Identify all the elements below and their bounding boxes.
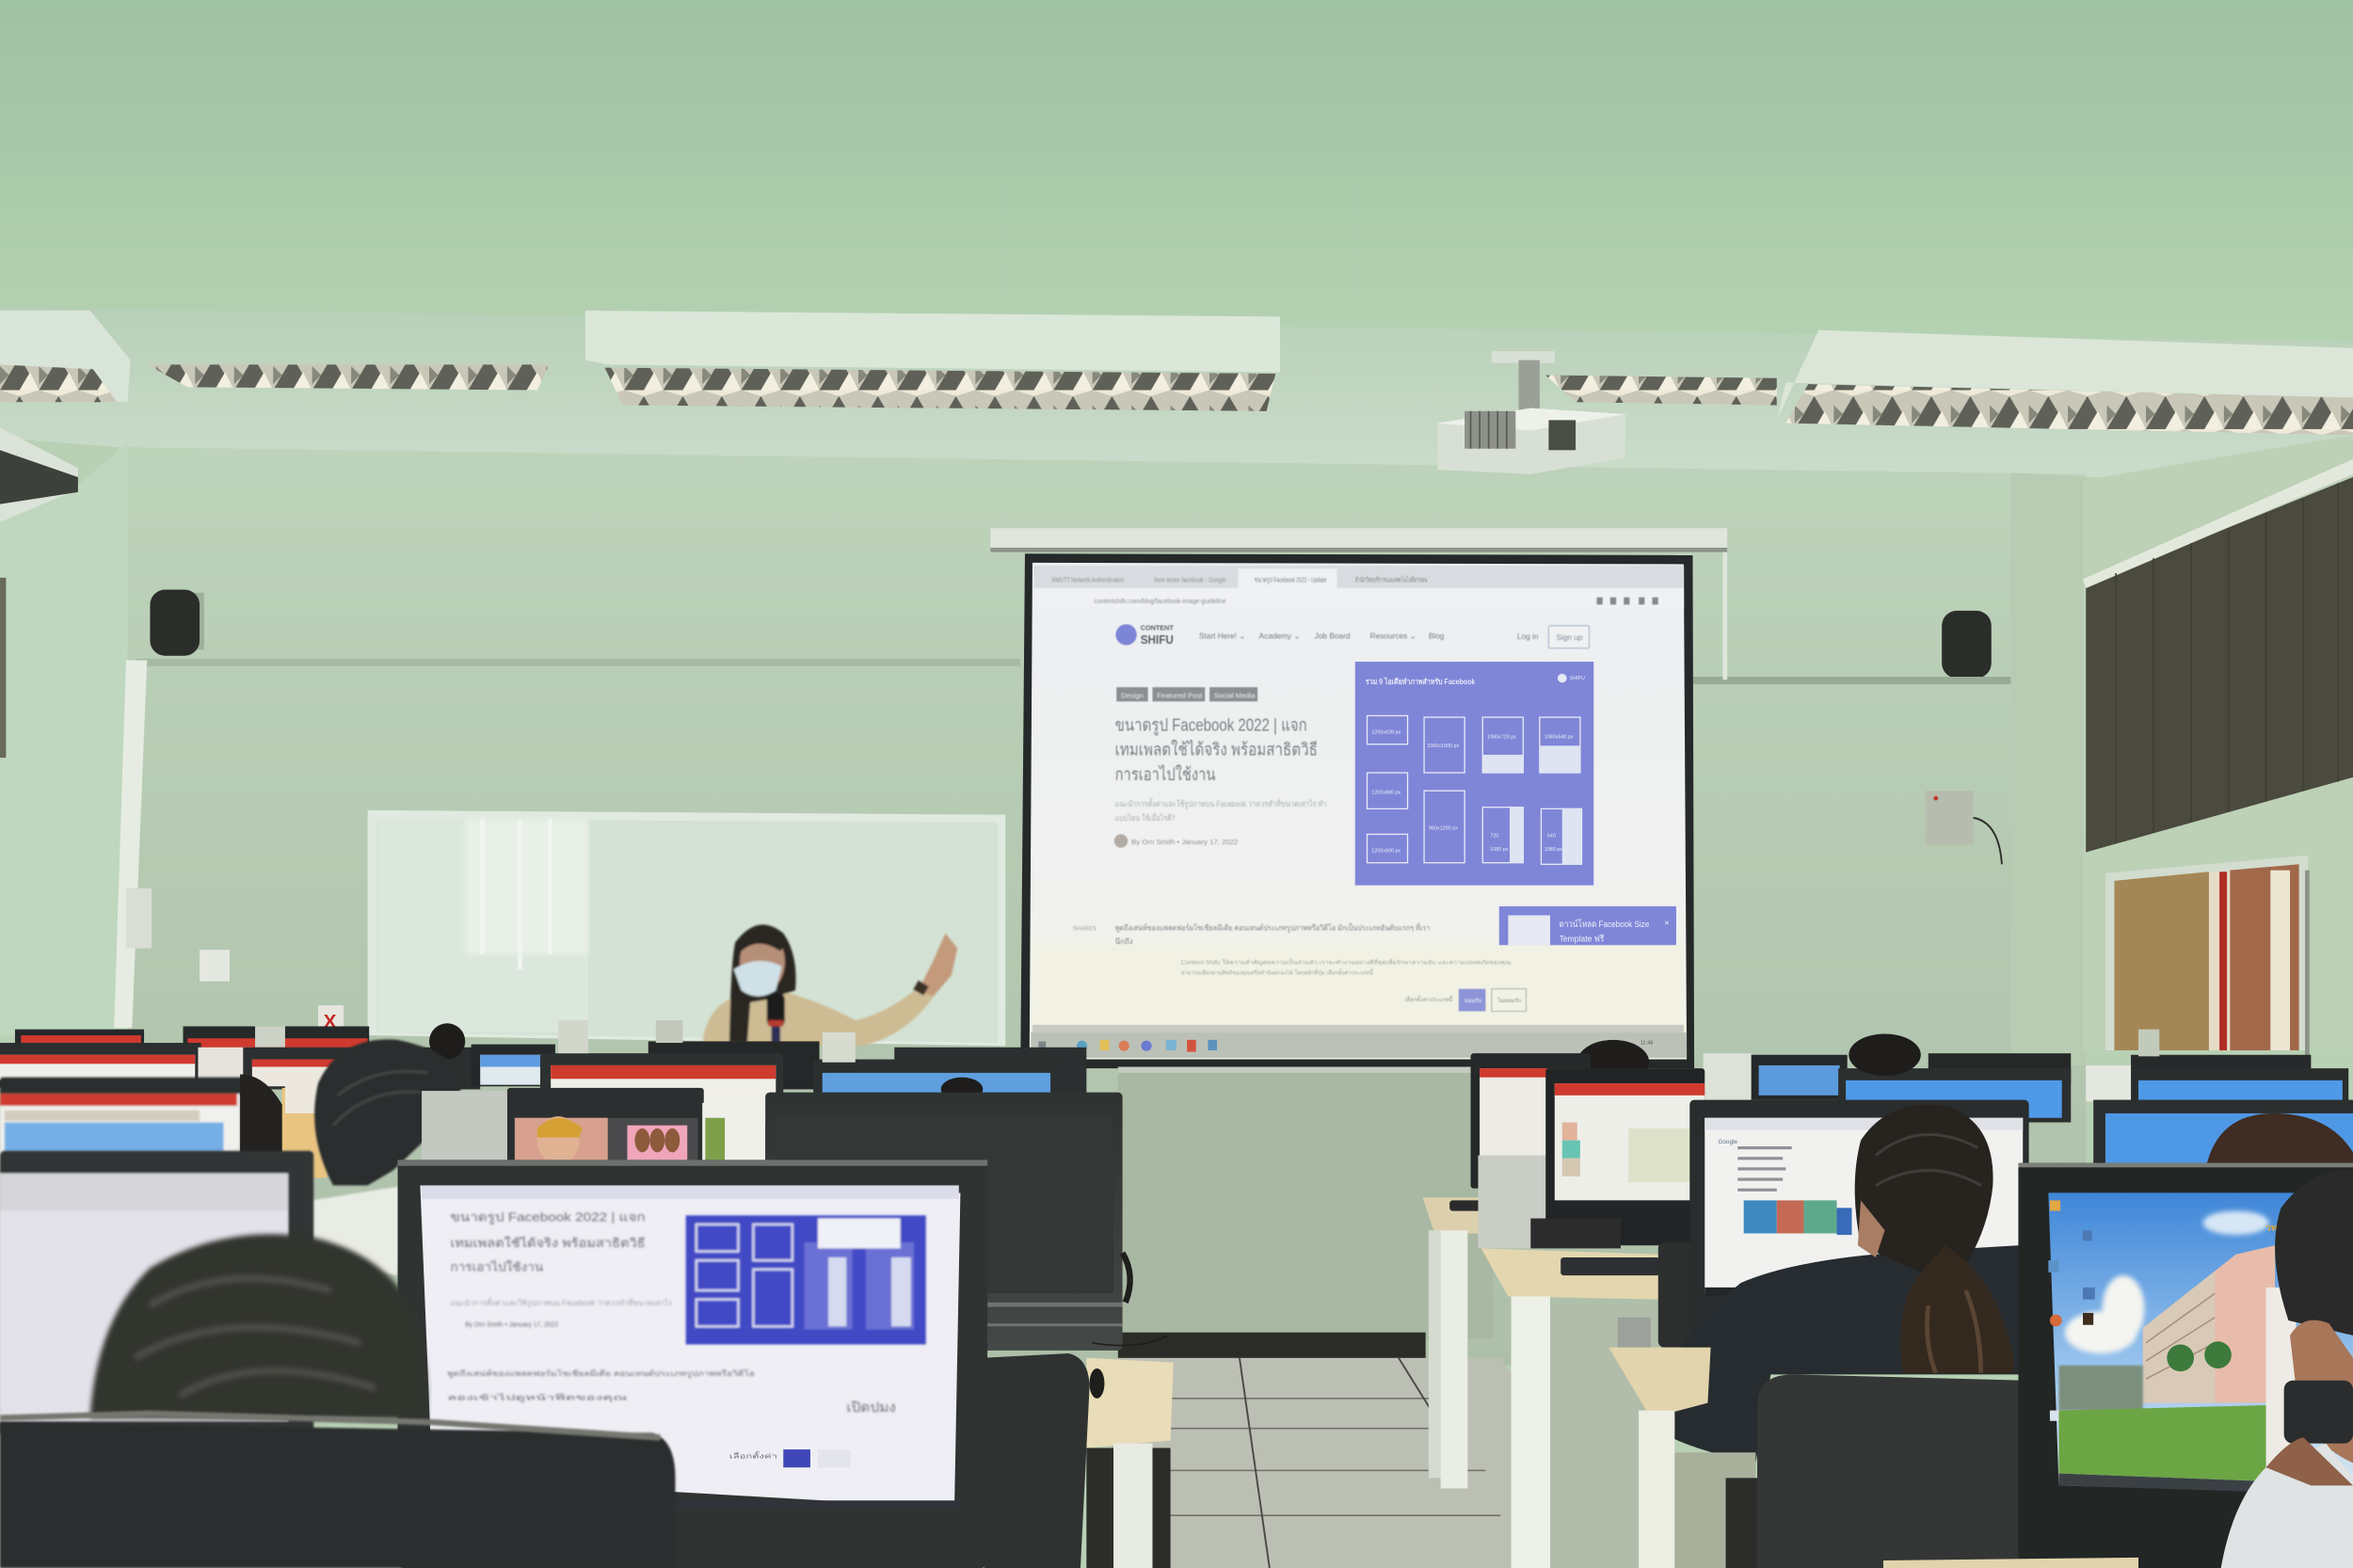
chair: right bbox=[1757, 1374, 2025, 1568]
article subtitle bbox=[1115, 797, 1326, 823]
desk: centre aisle bbox=[1086, 1336, 1174, 1568]
cookie notice: ยอมรับ bbox=[1465, 998, 1482, 1004]
door bbox=[2105, 856, 2310, 1058]
monitor: search results: Google bbox=[1719, 1139, 1738, 1145]
article subtitle: แนะนำการตั้งค่าและใช้รูปภาพบน Facebook ว่าควรทำที่ขนาดเท่าไร ทำ bbox=[1115, 797, 1326, 809]
desk: right far bbox=[1422, 1197, 1489, 1489]
browser tabs: RMUTT Network Authentication bbox=[1052, 576, 1124, 584]
site header: Blog bbox=[1429, 631, 1445, 640]
facebook sizes panel: 1000x1000 px bbox=[1427, 744, 1460, 749]
ceiling light: far left bbox=[0, 311, 131, 402]
mirrored article text bbox=[447, 1210, 896, 1416]
consent buttons on monitor: เลือกตั้งค่า bbox=[729, 1451, 777, 1461]
site header: Start Here! ⌄ bbox=[1199, 631, 1245, 640]
download banner: ดาวน์โหลด Facebook Size bbox=[1560, 919, 1649, 930]
monitor back: foreground left bbox=[0, 1414, 675, 1568]
article body snippet: นึกถึง bbox=[1115, 937, 1133, 946]
student with ponytail bbox=[1651, 1105, 2023, 1463]
consent buttons on monitor bbox=[729, 1449, 851, 1467]
chair: centre bbox=[983, 1353, 1090, 1568]
browser tabs: ขนาดรูป Facebook 2022 - Update bbox=[1255, 576, 1326, 584]
floor bbox=[1111, 1333, 1651, 1568]
side student: back row bbox=[240, 1068, 330, 1177]
site header: Resources ⌄ bbox=[1370, 631, 1417, 640]
facebook sizes panel: 1200x600 px bbox=[1371, 849, 1401, 855]
sizes panel on monitor bbox=[686, 1215, 926, 1344]
mirrored article text: เทมเพลตใช้ได้จริง พร้อมสาธิตวิธี bbox=[450, 1236, 646, 1250]
article title: เทมเพลตใช้ได้จริง พร้อมสาธิตวิธี bbox=[1115, 740, 1318, 760]
far monitors: centre rows bbox=[429, 1020, 1086, 1167]
paper stand bbox=[422, 1091, 507, 1163]
instructor bbox=[702, 924, 957, 1046]
windows taskbar bbox=[1031, 1032, 1687, 1058]
monitor: central with facebook article bbox=[398, 1160, 987, 1568]
article body snippet bbox=[1073, 921, 1430, 946]
monitor: search results bbox=[1689, 1100, 2029, 1343]
facebook sizes panel: รวม 9 ไอเดียทำภาพสำหรับ Facebook bbox=[1366, 677, 1476, 686]
mirrored article text: ลองเข้าไปดูหน้าฟีดของคุณ bbox=[447, 1393, 629, 1402]
facebook sizes panel: 1080 px bbox=[1490, 847, 1509, 853]
facebook sizes panel: 1080x540 px bbox=[1545, 734, 1574, 740]
facebook sizes panel: 960x1200 px bbox=[1429, 826, 1458, 832]
facebook sizes panel: 1080 px bbox=[1545, 847, 1562, 853]
article body snippet: SHARES bbox=[1073, 926, 1096, 932]
mirrored article text: เปิดปมง bbox=[846, 1400, 896, 1416]
projection screen bbox=[1020, 553, 1694, 1073]
mirrored article text: การเอาไปใช้งาน bbox=[450, 1259, 543, 1273]
site header bbox=[1115, 624, 1589, 648]
site header: Academy ⌄ bbox=[1259, 631, 1300, 640]
site header: CONTENT bbox=[1141, 624, 1174, 632]
desk: right middle bbox=[1481, 1242, 1700, 1568]
wall socket and thermostat bbox=[126, 888, 230, 982]
projection screen casing bbox=[990, 528, 1727, 680]
right side wall bbox=[2083, 435, 2353, 1050]
air conditioner bbox=[0, 427, 78, 522]
left row monitor with powerpoint bbox=[0, 1078, 252, 1157]
facebook sizes panel: 1080x720 px bbox=[1487, 734, 1516, 740]
download banner: × bbox=[1664, 919, 1670, 929]
cookie notice: เลือกตั้งค่าประเภทนี้ bbox=[1404, 995, 1453, 1003]
monitor: far right presentation bbox=[1470, 1053, 1591, 1248]
article tags: Social Media bbox=[1214, 691, 1256, 699]
site header: Job Board bbox=[1315, 631, 1351, 640]
article tags: Design bbox=[1121, 691, 1144, 699]
browser tabs: New tester facebook - Google bbox=[1154, 576, 1226, 584]
ceiling light: centre bbox=[585, 311, 1280, 411]
browser tabs: สำนักวิทยบริการและเทคโนโลยีสารสน bbox=[1355, 576, 1427, 584]
facebook sizes panel: 1200x628 px bbox=[1371, 730, 1401, 736]
browser tabs bbox=[1034, 566, 1684, 608]
ceiling light: behind projector bbox=[1545, 376, 1777, 405]
whiteboard bbox=[368, 810, 1005, 1046]
desktop icons bbox=[2048, 1200, 2095, 1421]
speaker: right bbox=[1942, 611, 1992, 679]
cookie notice: ไม่ยอมรับ bbox=[1497, 997, 1522, 1004]
scrollbar bbox=[1032, 1025, 1684, 1032]
desktop wallpaper: building bbox=[2059, 1211, 2296, 1493]
wall switch box bbox=[1926, 791, 2002, 864]
mirrored article text: By Orn Smith • January 17, 2022 bbox=[465, 1320, 558, 1328]
mirrored article text: ขนาดรูป Facebook 2022 | แจก bbox=[450, 1210, 646, 1225]
wall rail bbox=[114, 659, 2010, 1028]
upper wall bbox=[0, 0, 2353, 360]
site header: SHIFU bbox=[1141, 632, 1174, 647]
article tags: Featured Post bbox=[1157, 691, 1203, 699]
site header: Sign up bbox=[1556, 632, 1583, 642]
article title: ขนาดรูป Facebook 2022 | แจก bbox=[1115, 714, 1307, 735]
monitor: foreground desktop: วทศ bbox=[2266, 1223, 2283, 1233]
author line: By Orn Smith • January 17, 2022 bbox=[1131, 838, 1238, 846]
browser tabs: contentshifu.com/blog/facebook-image-guideline bbox=[1094, 597, 1226, 605]
window blind bbox=[2083, 459, 2353, 853]
back wall bbox=[117, 447, 2086, 1366]
ceiling light: left strip bbox=[147, 364, 550, 391]
cookie notice: Content Shifu ให้ความสำคัญต่อความเป็นส่วนตัว เราจะทำงานอย่างดีที่สุดเพื่อรักษาความลับ และความปลอดภัยของคุณ bbox=[1181, 957, 1512, 966]
monitor row right: desktop bbox=[2093, 1100, 2353, 1169]
monitor: slides editor bbox=[1530, 1068, 1705, 1248]
student: foreground right bbox=[2221, 1170, 2353, 1568]
facebook sizes panel bbox=[1355, 662, 1593, 886]
monitor with photo editor bbox=[507, 1088, 765, 1177]
article tags bbox=[1116, 687, 1257, 701]
mirrored article text: แนะนำการตั้งค่าและใช้รูปภาพบน Facebook ว่าควรทำที่ขนาดเท่าไร bbox=[450, 1297, 673, 1308]
far monitors: left rows bbox=[0, 1026, 480, 1093]
cookie notice: สามารถเลือกตามสิทธิของคุณหรือทำข้อตกลงได้ โดยคลิกที่ปุ่ม เลือกตั้งค่าประเภทนี้ bbox=[1181, 968, 1374, 976]
projector bbox=[1437, 351, 1625, 474]
desk edge: bottom right bbox=[1883, 1558, 2138, 1568]
facebook sizes panel: 540 bbox=[1547, 834, 1556, 840]
windows taskbar: 11:46 bbox=[1641, 1041, 1654, 1047]
left side wall bbox=[0, 442, 128, 1035]
site header: Log in bbox=[1517, 632, 1539, 641]
cookie notice bbox=[1032, 945, 1684, 1026]
sign with red cross: X bbox=[324, 1011, 337, 1032]
far monitors: right rows bbox=[1577, 1030, 2348, 1123]
facebook sizes panel: 1200x800 px bbox=[1371, 790, 1401, 795]
speaker: left bbox=[150, 590, 204, 656]
desk: right front bbox=[1609, 1348, 1759, 1568]
author line bbox=[1114, 834, 1238, 848]
sign with red cross bbox=[318, 1005, 344, 1037]
article body snippet: พูดถึงเสน่ห์ของแพลตฟอร์มโซเชียลมีเดีย คอนเทนต์ประเภทรูปภาพหรือวิดีโอ มักเป็นประเภทอันดับแรกๆ ที่เรา bbox=[1115, 921, 1430, 933]
article title: การเอาไปใช้งาน bbox=[1115, 764, 1216, 784]
mirrored article text: พูดถึงเสน่ห์ของแพลตฟอร์มโซเชียลมีเดีย คอนเทนต์ประเภทรูปภาพหรือวิดีโอ bbox=[447, 1368, 755, 1379]
article subtitle: แบบไหน ใช้เมื่อไรดี? bbox=[1115, 812, 1176, 823]
download banner: Template ฟรี bbox=[1560, 933, 1604, 944]
monitor back: centre bbox=[765, 1093, 1130, 1351]
student head: foreground left bbox=[90, 1234, 427, 1419]
monitor: front left white screen bbox=[0, 1151, 313, 1436]
ceiling soffit bbox=[0, 308, 2353, 480]
student head: second row bbox=[312, 1039, 465, 1275]
monitor: foreground desktop bbox=[2018, 1163, 2353, 1568]
ceiling light: right bbox=[1777, 330, 2353, 435]
facebook sizes panel: SHIFU bbox=[1570, 676, 1585, 681]
article title bbox=[1115, 714, 1318, 784]
download banner bbox=[1499, 906, 1676, 945]
facebook sizes panel: 720 bbox=[1490, 834, 1498, 840]
